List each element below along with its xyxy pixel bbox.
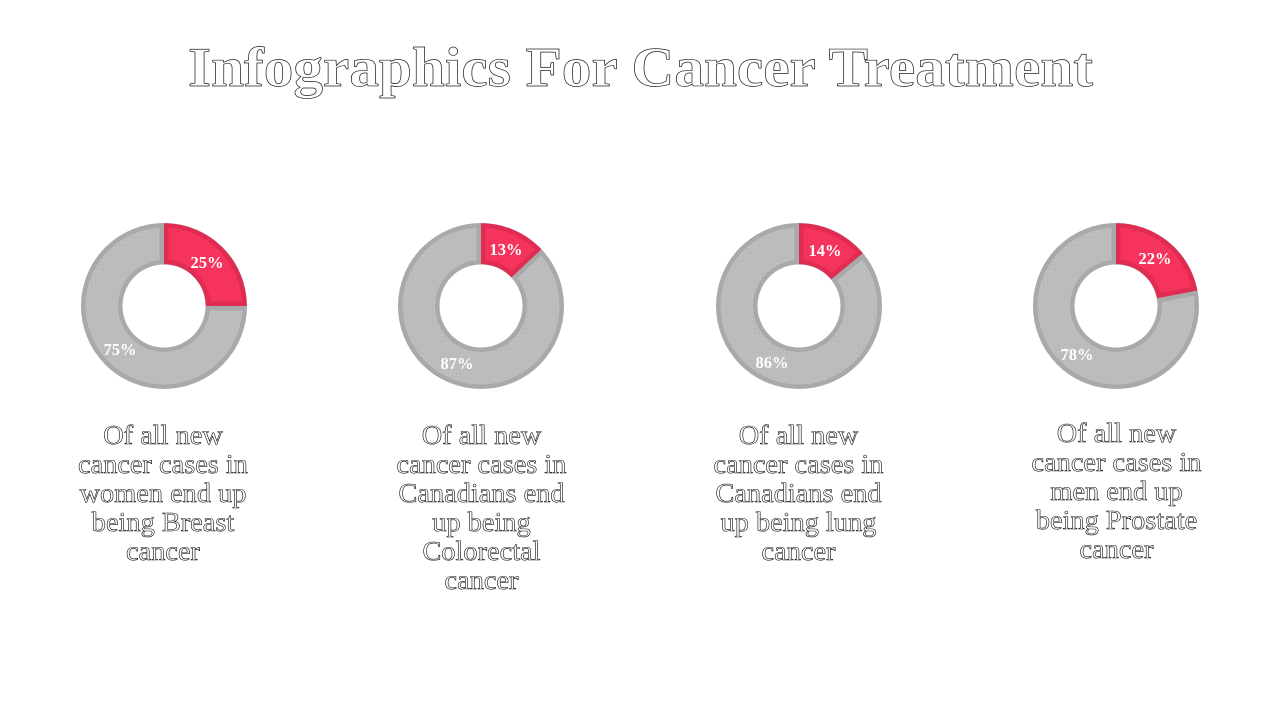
caption: lung cancer: cancer cases in: [714, 449, 884, 479]
caption: prostate cancer: being Prostate: [1036, 505, 1197, 535]
panel: breast cancer: [78, 225, 248, 566]
caption: breast cancer: cancer: [126, 536, 200, 566]
donut chart: 25%: [83, 225, 245, 387]
caption: lung cancer: Of all new: [739, 420, 858, 450]
caption: colorectal cancer: cancer: [445, 565, 518, 595]
panel: prostate cancer: [1032, 225, 1202, 564]
caption: colorectal cancer: up being: [432, 507, 531, 537]
donut chart: 13%: 87%: [440, 354, 474, 373]
donut chart: 14%: 86%: [756, 353, 788, 372]
caption: prostate cancer: cancer cases in: [1032, 447, 1202, 477]
caption: breast cancer: being Breast: [92, 507, 235, 537]
caption: prostate cancer: men end up: [1050, 476, 1183, 506]
caption: colorectal cancer: cancer cases in: [397, 449, 567, 479]
title: Infographics For Cancer Treatment: [188, 37, 1093, 99]
donut chart: 13%: 13%: [490, 240, 522, 259]
caption: prostate cancer: cancer: [1080, 534, 1153, 564]
donut chart: 14%: [718, 225, 880, 387]
caption: lung cancer: Canadians end: [715, 478, 882, 508]
caption: breast cancer: women end up: [80, 478, 246, 508]
caption: breast cancer: cancer cases in: [78, 449, 248, 479]
caption: lung cancer: cancer: [762, 536, 835, 566]
caption: breast cancer: Of all new: [103, 420, 223, 450]
caption: colorectal cancer: Colorectal: [422, 536, 541, 566]
donut chart: 14%: 14%: [808, 241, 842, 260]
panel: colorectal cancer: [397, 225, 567, 595]
caption: prostate cancer: Of all new: [1057, 418, 1176, 448]
donut chart: 13%: [400, 225, 562, 387]
donut chart: 22%: 78%: [1060, 345, 1094, 364]
panel: lung cancer: [714, 225, 884, 566]
donut chart: 22%: 22%: [1138, 249, 1172, 268]
caption: colorectal cancer: Canadians end: [398, 478, 565, 508]
donut chart: 25%: 25%: [190, 253, 224, 272]
donut chart: 25%: 75%: [104, 340, 136, 359]
caption: lung cancer: up being lung: [721, 507, 877, 537]
caption: colorectal cancer: Of all new: [422, 420, 541, 450]
donut chart: 22%: [1035, 225, 1197, 387]
